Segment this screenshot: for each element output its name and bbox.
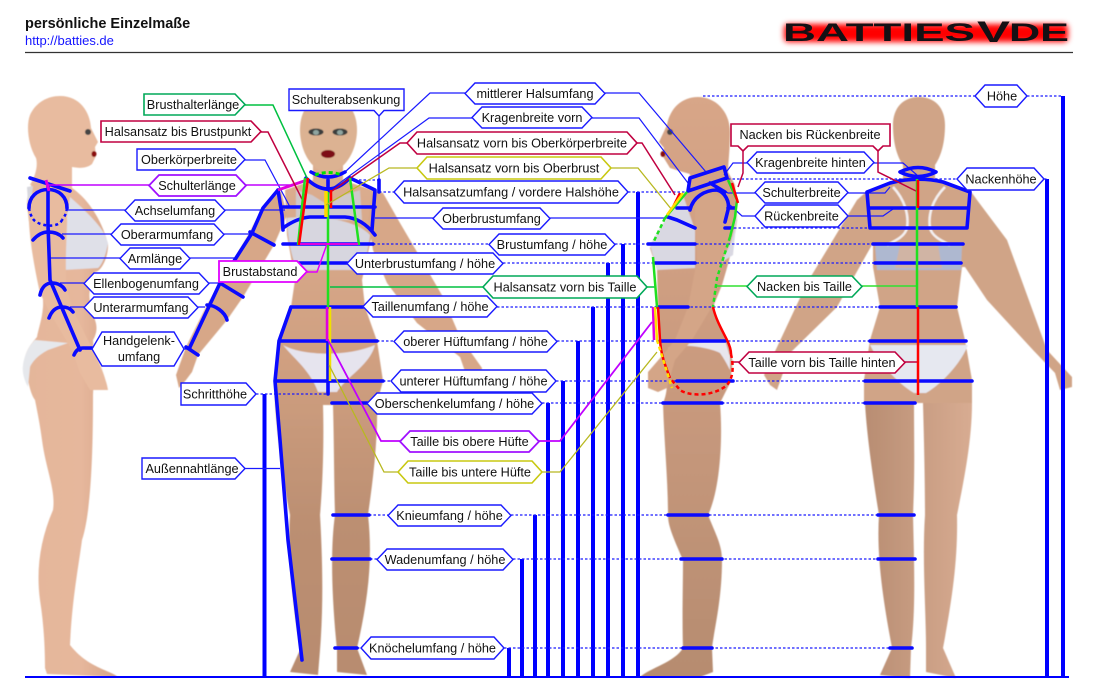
label: Brusthalterlänge bbox=[144, 94, 245, 115]
label: Handgelenkumfang: umfang bbox=[118, 350, 160, 364]
label: mittlerer Halsumfang: mittlerer Halsumfang bbox=[476, 87, 594, 101]
label: Schulterlänge: Schulterlänge bbox=[158, 179, 236, 193]
label: Nacken bis Rückenbreite: Nacken bis Rückenbreite bbox=[739, 128, 881, 142]
label: Schulterbreite: Schulterbreite bbox=[762, 186, 841, 200]
figure: front view bbox=[176, 97, 482, 675]
label: Halsansatz vorn bis Taille: Halsansatz vorn bis Taille bbox=[494, 280, 636, 294]
figure: back view bbox=[764, 97, 1072, 678]
label: Halsansatz vorn bis Oberbrust bbox=[417, 157, 611, 179]
label: Taille bis untere Hüfte bbox=[398, 461, 542, 483]
label: Schulterabsenkung bbox=[289, 89, 404, 116]
thick blue measurement marks: right figure bbox=[648, 167, 735, 648]
label: Wadenumfang / höhe: Wadenumfang / höhe bbox=[385, 553, 505, 567]
label: Halsansatz vorn bis Oberbrust: Halsansatz vorn bis Oberbrust bbox=[429, 162, 600, 176]
label: Rückenbreite bbox=[755, 205, 848, 227]
label: mittlerer Halsumfang bbox=[465, 83, 605, 104]
label: Ellenbogenumfang: Ellenbogenumfang bbox=[93, 277, 199, 291]
thick blue measurement marks: left figure bbox=[29, 178, 92, 355]
label: Taille vorn bis Taille hinten bbox=[739, 352, 905, 373]
label: Oberkörperbreite bbox=[137, 149, 245, 170]
logo: V bbox=[977, 16, 1010, 49]
label: Achselumfang: Achselumfang bbox=[135, 204, 215, 218]
label: Armlänge: Armlänge bbox=[128, 252, 182, 266]
label: Halsansatz vorn bis Taille bbox=[483, 276, 647, 298]
label: Knöchelumfang / höhe: Knöchelumfang / höhe bbox=[369, 642, 496, 656]
coloured construction lines bbox=[46, 105, 918, 472]
label: Kragenbreite hinten bbox=[747, 152, 874, 173]
label: unterer Hüftumfang / höhe bbox=[391, 370, 556, 392]
thick blue measurement marks: back figure bbox=[865, 168, 972, 648]
label: Taille bis untere Hüfte: Taille bis untere Hüfte bbox=[409, 466, 531, 480]
label: Oberarmumfang bbox=[111, 224, 224, 245]
label: Schulterbreite bbox=[755, 182, 848, 203]
label: Außennahtlänge: Außennahtlänge bbox=[145, 462, 239, 476]
label: Nackenhöhe: Nackenhöhe bbox=[965, 172, 1037, 186]
figure: left side view bbox=[23, 96, 118, 677]
header title: persönliche Einzelmaße bbox=[25, 16, 190, 32]
label: Achselumfang bbox=[125, 200, 225, 221]
label: Brustumfang / höhe: Brustumfang / höhe bbox=[497, 238, 607, 252]
label: Nacken bis Rückenbreite bbox=[731, 124, 890, 151]
figure: right side view bbox=[640, 97, 737, 677]
label: Oberkörperbreite: Oberkörperbreite bbox=[141, 153, 237, 167]
label: Kragenbreite hinten: Kragenbreite hinten bbox=[755, 156, 866, 170]
label: Halsansatzumfang / vordere Halshöhe: Halsansatzumfang / vordere Halshöhe bbox=[403, 186, 619, 200]
label: Knieumfang / höhe: Knieumfang / höhe bbox=[396, 509, 503, 523]
label: oberer Hüftumfang / höhe: oberer Hüftumfang / höhe bbox=[403, 335, 548, 349]
label: Kragenbreite vorn bbox=[472, 107, 592, 128]
logo: DE bbox=[1009, 19, 1069, 47]
label: Höhe bbox=[975, 85, 1027, 107]
label: Wadenumfang / höhe bbox=[377, 549, 513, 570]
label: Schulterlänge bbox=[149, 175, 246, 196]
label: Schritthöhe bbox=[181, 383, 256, 405]
label: Handgelenkumfang: Handgelenk- bbox=[103, 334, 175, 348]
label: Knöchelumfang / höhe bbox=[361, 637, 504, 659]
label: Halsansatz bis Brustpunkt bbox=[101, 121, 261, 142]
label: Halsansatz vorn bis Oberkörperbreite: Halsansatz vorn bis Oberkörperbreite bbox=[417, 136, 627, 150]
thick blue measurement marks: front figure bbox=[186, 172, 383, 660]
label: Schulterabsenkung: Schulterabsenkung bbox=[292, 93, 400, 107]
label: Armlänge bbox=[120, 248, 190, 269]
label: Halsansatz vorn bis Oberkörperbreite bbox=[407, 132, 637, 154]
label: Brustabstand: Brustabstand bbox=[223, 265, 297, 279]
label: Unterarmumfang bbox=[84, 297, 198, 318]
label: Halsansatz bis Brustpunkt: Halsansatz bis Brustpunkt bbox=[105, 125, 252, 139]
label: Unterbrustumfang / höhe: Unterbrustumfang / höhe bbox=[355, 257, 495, 271]
logo bbox=[783, 16, 1069, 49]
label: Brustabstand bbox=[219, 261, 307, 282]
label: Halsansatzumfang / vordere Halshöhe bbox=[394, 181, 628, 203]
label: Taille bis obere Hüfte bbox=[400, 431, 539, 452]
label: Nacken bis Taille: Nacken bis Taille bbox=[757, 280, 852, 294]
label: Unterbrustumfang / höhe bbox=[347, 253, 503, 274]
label: Oberbrustumfang: Oberbrustumfang bbox=[442, 212, 541, 226]
label: Brustumfang / höhe bbox=[489, 234, 615, 255]
label: Rückenbreite: Rückenbreite bbox=[764, 210, 839, 224]
header link: http://batties.de bbox=[25, 33, 114, 48]
thin leader lines bbox=[48, 93, 917, 468]
label: Kragenbreite vorn: Kragenbreite vorn bbox=[482, 111, 582, 125]
label: Taillenumfang / höhe bbox=[363, 296, 497, 317]
label: oberer Hüftumfang / höhe bbox=[394, 331, 557, 352]
label: Außennahtlänge bbox=[142, 458, 245, 479]
label: Oberbrustumfang bbox=[433, 208, 550, 229]
label: Oberschenkelumfang / höhe: Oberschenkelumfang / höhe bbox=[375, 397, 534, 411]
label: Brusthalterlänge: Brusthalterlänge bbox=[147, 98, 239, 112]
label: Taille vorn bis Taille hinten: Taille vorn bis Taille hinten bbox=[748, 356, 896, 370]
label: Nacken bis Taille bbox=[747, 276, 862, 297]
label: Höhe: Höhe bbox=[987, 90, 1017, 104]
logo: BATTIES bbox=[783, 19, 975, 47]
label: Oberarmumfang: Oberarmumfang bbox=[121, 228, 213, 242]
label: Unterarmumfang: Unterarmumfang bbox=[93, 301, 189, 315]
label: unterer Hüftumfang / höhe: unterer Hüftumfang / höhe bbox=[399, 374, 548, 388]
label: Nackenhöhe bbox=[957, 168, 1044, 190]
label: Taille bis obere Hüfte: Taille bis obere Hüfte bbox=[410, 435, 529, 449]
label: Knieumfang / höhe bbox=[388, 505, 511, 526]
label: Taillenumfang / höhe: Taillenumfang / höhe bbox=[371, 300, 489, 314]
dotted measurement guides bbox=[256, 96, 1063, 648]
label: Ellenbogenumfang bbox=[84, 273, 209, 294]
label: Handgelenkumfang bbox=[92, 332, 184, 366]
label: Schritthöhe: Schritthöhe bbox=[183, 388, 247, 402]
height bars and floor line bbox=[25, 96, 1069, 678]
label: Oberschenkelumfang / höhe bbox=[367, 393, 542, 414]
